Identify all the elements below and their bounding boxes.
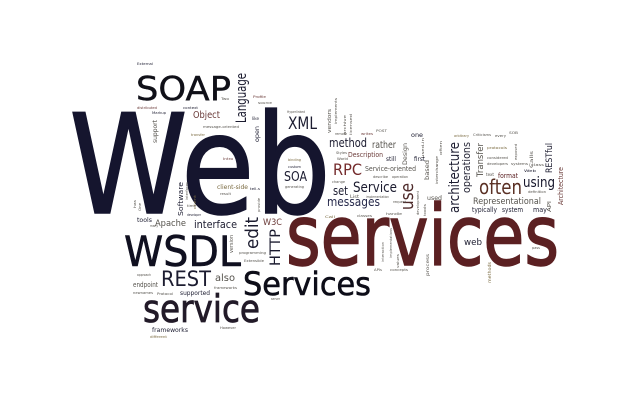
small words: interfaces [185,182,189,200]
word: system: system [502,206,523,214]
small words: arbitrary [454,134,469,138]
small words: text [486,172,494,177]
word: Language: Language [234,73,250,123]
small words: different [150,335,168,339]
small words: often [439,141,443,155]
small words: Two [220,97,229,101]
word: still: still [386,156,396,163]
small words: programming [239,251,266,255]
small words: API [547,201,553,212]
small words: External [137,62,153,66]
small words: distributed [137,106,157,110]
small words: systems [511,162,528,166]
small words: List [350,194,360,199]
small words: like [252,116,260,121]
word: Apache: Apache [155,219,186,229]
small words: describe [373,175,388,179]
small words: classes [357,214,372,218]
small words: writes [361,132,373,136]
word: WSDL: WSDL [124,227,242,276]
small words: Call [325,215,335,219]
word: service: service [143,287,260,331]
word: tools: tools [137,217,152,224]
word: Service-oriented: Service-oriented [365,165,416,173]
small words: every [495,134,506,138]
small words: provide [257,198,261,212]
small words: Criticisms [473,133,491,137]
word: HTTP: HTTP [268,229,284,266]
small words: protocols [487,146,507,150]
small words: However [220,326,237,330]
word: RESTful: RESTful [545,143,555,173]
small words: generating [285,185,304,189]
word: operations: operations [460,142,473,193]
small words: handle [386,212,402,216]
word: support: support [152,119,159,143]
small words: process [425,254,430,276]
small words: interchange [435,156,439,184]
word: typically: typically [472,206,497,214]
word: may: may [533,206,547,214]
word: often: often [479,175,522,199]
word: W3C: W3C [263,218,282,228]
small words: has [133,200,137,208]
small words: interaction [381,242,385,262]
word: Web: Web [69,85,331,246]
small words: binding [288,158,301,162]
small words: many [150,224,158,228]
small words: POST [376,129,388,133]
word: SOA: SOA [284,170,307,185]
word: set: set [333,184,348,198]
word: use: use [397,183,418,210]
small words: implementation [366,195,389,199]
word: rather: rather [372,140,397,151]
word: SOAP: SOAP [136,69,231,108]
word: Description: Description [348,151,383,159]
small words: Markup [152,111,167,115]
word: method: method [329,136,367,150]
word: also: also [215,273,235,284]
small words: development [416,190,420,215]
word: client-side: client-side [217,183,248,191]
small words: request [393,200,407,204]
small words: concepts [390,268,408,272]
small words: implements [334,98,338,124]
word: XML: XML [288,114,317,134]
word: Software: Software [177,182,185,216]
word: edit: edit [242,217,263,249]
small words: approach [137,273,151,277]
small words: newnames [133,291,153,295]
word: Services: Services [243,265,371,303]
small words: operation [392,175,408,179]
word: endpoint: endpoint [133,281,158,289]
small words: source [258,101,272,105]
small words: used-in [421,138,425,158]
small words: exposed [514,144,518,160]
small words: client [193,194,197,209]
small words: licensed [349,114,353,135]
word: version: version [229,235,235,253]
word: format: format [498,172,518,180]
word: services: services [286,187,559,285]
small words: Calls [529,151,534,168]
word: open: open [254,126,261,142]
small words: tell-s [250,187,260,191]
small words: Profile [253,95,266,99]
small words: Extensible [244,259,264,263]
word: REST: REST [161,267,211,291]
small words: Protocol [157,292,173,296]
small words: archive [343,115,347,135]
word: Object: Object [193,110,220,121]
word: vendors: vendors [327,109,333,133]
word: Transfer: Transfer [476,143,486,178]
small words: pass [532,246,540,250]
small words: result [220,192,232,196]
small words: Styles [336,151,347,155]
word: Design: Design [402,143,409,165]
small words: World [337,157,348,161]
small words: custom [288,165,302,169]
word: Architecture: Architecture [557,167,565,205]
small words: transfer [191,133,206,137]
word: frameworks: frameworks [152,326,189,334]
small words: tools [423,204,427,216]
small words: Hyperlinked [287,110,305,114]
word: Representational: Representational [473,197,541,207]
word: first: first [414,156,426,163]
small words: class [531,163,544,167]
small words: developers [487,162,508,166]
word: web: web [464,238,482,248]
small words: values [396,254,400,268]
small words: message-oriented [203,125,239,129]
word: based: based [423,160,431,180]
word: messages: messages [327,195,380,209]
small words: One [138,203,142,211]
word: Service: Service [353,180,397,196]
small words: change [332,180,345,184]
small words: server [271,297,280,301]
small words: frameworks [214,286,237,290]
small words: remote [335,132,347,136]
small words: definition [528,190,546,194]
small words: methods [487,262,492,283]
word: supported: supported [180,289,210,297]
small words: Intro [223,157,233,161]
small words: time [187,204,196,208]
small words: APIs [374,268,382,272]
small words [133,62,553,339]
small words: implementations [389,228,393,258]
word: interface: interface [194,218,237,231]
word: architecture: architecture [447,142,463,213]
small words: context [183,106,199,110]
small words: developer [187,213,201,217]
word: using: using [523,175,555,191]
small words: considered [487,156,508,160]
word: used: used [427,194,442,202]
small words: Web [524,169,537,173]
word: one: one [411,131,423,139]
word: RPC: RPC [333,160,362,179]
small words: SOB [509,131,519,135]
